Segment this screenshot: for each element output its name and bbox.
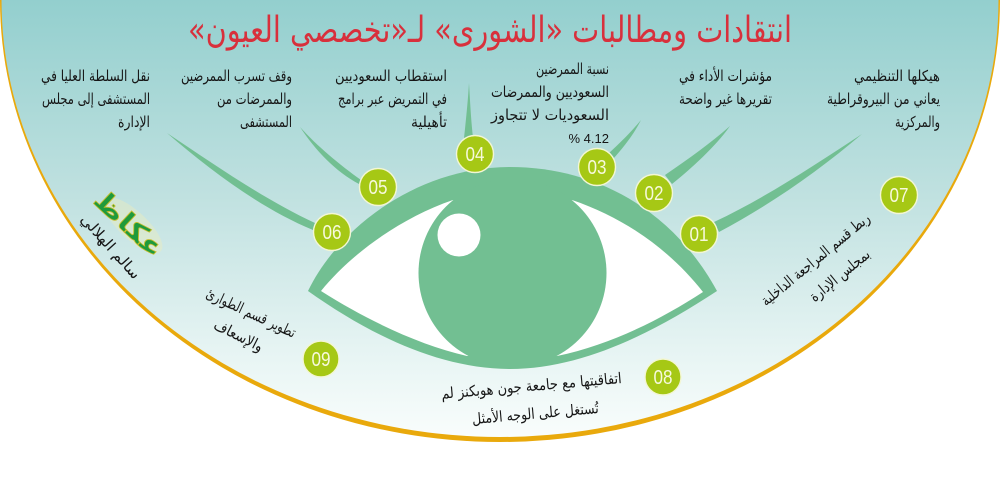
text block: item 09 (rotated): والإسعاف [211, 315, 266, 356]
item 03 number: 03 [588, 157, 606, 179]
text block: item 01 [827, 67, 940, 131]
item 04 number [456, 136, 494, 172]
eye [308, 167, 717, 369]
eye outline and lids [308, 167, 717, 369]
text block: item 04: استقطاب السعوديين [335, 67, 447, 85]
text block: item 06: المستشفى إلى مجلس [42, 90, 150, 108]
item 07 number: 07 [890, 185, 908, 207]
text block: item 07 (rotated): بمجلس الإدارة [806, 245, 874, 306]
text block: item 01: هيكلها التنظيمي [854, 67, 940, 86]
text block: item 03: السعوديات لا تتجاوز [490, 106, 609, 124]
text block: item 09 (rotated): تطوير قسم الطوارئ [203, 284, 299, 342]
item 02 number [636, 174, 672, 212]
item 09 number: 09 [312, 349, 330, 371]
text block: item 02: مؤشرات الأداء في [679, 66, 772, 86]
text block: item 05: والممرضات من [217, 90, 292, 108]
text block: item 07 (rotated): ربط قسم المراجعة الداخلية [757, 209, 874, 310]
text block: item 06: نقل السلطة العليا في [41, 67, 150, 86]
spikes connecting numbers to text [167, 83, 862, 232]
item 01 number: 01 [690, 224, 708, 246]
item 06 number: 06 [322, 222, 342, 244]
text block: item 06 [41, 67, 150, 131]
pupil highlight [438, 214, 480, 256]
text block: item 02: تقريرها غير واضحة [679, 90, 772, 108]
item 06 number [314, 214, 350, 250]
logo: Okaz newspaper: عكاظ [87, 184, 170, 264]
item 04 number: 04 [466, 144, 484, 166]
text block: item 02 [679, 66, 772, 108]
text block: item 01: يعاني من البيروقراطية [827, 90, 940, 109]
iris [418, 179, 606, 367]
text block: item 03: السعوديين والممرضات [491, 83, 609, 101]
item 03 number [578, 148, 616, 186]
text block: item 05: وقف تسرب الممرضين [181, 67, 292, 85]
text block: item 03 [490, 60, 609, 146]
text block: item 03: % 4.12 [569, 131, 609, 146]
text block: item 05 [181, 67, 292, 131]
text block: item 08 (rotated): تُستغل على الوجه الأمثل [471, 398, 600, 428]
item 02 number: 02 [644, 183, 664, 205]
credit: author name: سالم الهلالي [76, 210, 144, 283]
eye white [321, 200, 703, 356]
item 05 number: 05 [368, 177, 388, 199]
item 09 number [303, 341, 339, 377]
title: انتقادات ومطالبات «الشورى» لـ«تخصصي العيون» [188, 10, 792, 51]
text block: item 01: والمركزية [895, 113, 940, 131]
text block: item 07 (rotated) [757, 209, 874, 310]
item 01 number [680, 216, 718, 252]
text block: item 04 [335, 67, 447, 131]
item 07 number [880, 176, 918, 214]
text block: item 04: في التمريض عبر برامج [338, 90, 447, 109]
text block: item 08 (rotated): اتفاقيتها مع جامعة جون هوبكنز لم [440, 369, 622, 403]
item 05 number [360, 168, 396, 206]
text block: item 06: الإدارة [118, 113, 150, 131]
text block: item 04: تأهيلية [411, 111, 447, 131]
item 08 number [645, 359, 681, 395]
text block: item 05: المستشفى [240, 113, 292, 131]
text block: item 03: نسبة الممرضين [536, 60, 609, 78]
item 08 number: 08 [654, 367, 672, 389]
text block: item 08 (rotated) [440, 369, 622, 428]
